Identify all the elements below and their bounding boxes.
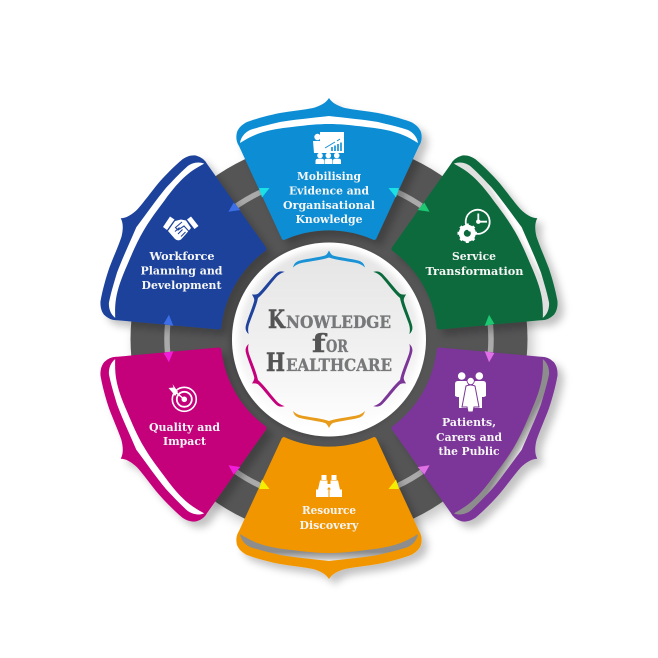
- title: EALTHCARE: [286, 356, 392, 376]
- label: patients carers and public: [436, 415, 502, 458]
- label: mobilising evidence: Organisational: [283, 198, 376, 212]
- label: mobilising evidence: Evidence and: [289, 184, 369, 198]
- panel: quality and impact: [74, 307, 290, 539]
- label: service transformation: Service: [452, 249, 496, 263]
- label: resource discovery: Resource: [302, 503, 356, 517]
- icon: binoculars: [316, 475, 342, 497]
- label: workforce planning: [140, 249, 222, 292]
- icon: presenter with chart: [313, 132, 344, 164]
- panel: service transformation: [368, 138, 584, 370]
- central disc: [232, 242, 426, 436]
- label: workforce planning: Planning and: [140, 264, 222, 278]
- panel: resource discovery: [236, 437, 422, 579]
- panel: workforce planning: [74, 138, 290, 370]
- icon: target with arrow: [168, 384, 196, 411]
- panel: patients carers and public: [368, 307, 584, 539]
- label: quality and impact: [149, 420, 220, 448]
- label: resource discovery: [300, 503, 359, 532]
- inner brackets: [234, 250, 424, 428]
- label: quality and impact: Quality and: [149, 420, 220, 434]
- label: mobilising evidence: Mobilising: [297, 169, 361, 183]
- label: service transformation: [426, 249, 524, 278]
- label: quality and impact: Impact: [163, 434, 207, 448]
- gray ring: [130, 140, 528, 538]
- icon: three people: [455, 372, 486, 412]
- label: workforce planning: Workforce: [149, 249, 214, 263]
- title: [266, 305, 392, 377]
- label: resource discovery: Discovery: [300, 518, 359, 532]
- title: OR: [326, 337, 349, 357]
- label: service transformation: Transformation: [426, 264, 524, 278]
- icon: handshake: [163, 216, 198, 240]
- label: mobilising evidence: [283, 169, 376, 226]
- label: workforce planning: Development: [142, 278, 222, 292]
- title: NOWLEDGE: [286, 313, 391, 333]
- label: patients carers and public: the Public: [438, 444, 500, 458]
- title: H: [266, 348, 285, 377]
- panel: mobilising evidence: [236, 98, 422, 240]
- label: mobilising evidence: Knowledge: [296, 212, 362, 226]
- title: f: [312, 329, 328, 358]
- label: patients carers and public: Carers and: [436, 430, 502, 444]
- label: patients carers and public: Patients,: [442, 415, 496, 429]
- icon: gear and clock: [458, 210, 490, 243]
- title: K: [268, 305, 286, 334]
